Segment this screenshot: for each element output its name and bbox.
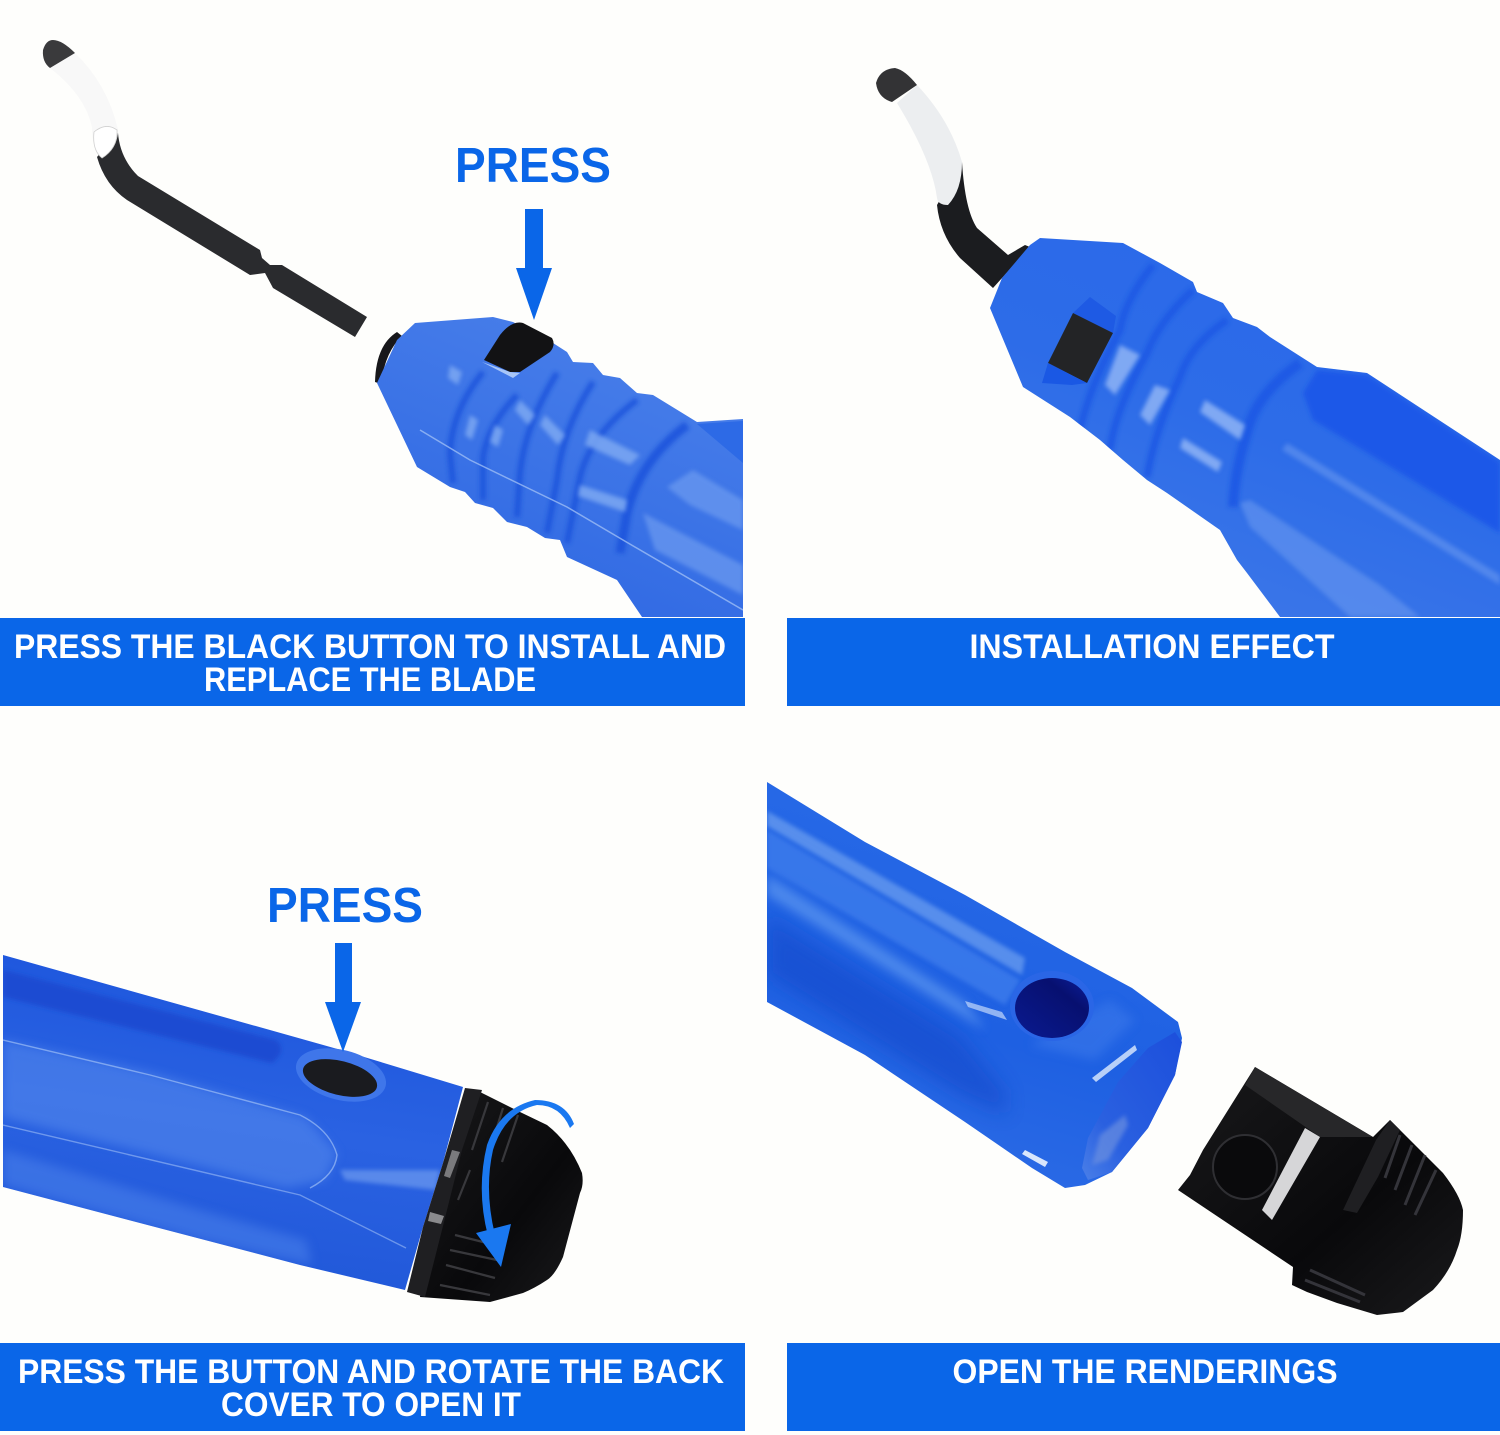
press label: PRESS <box>455 139 611 193</box>
down arrow <box>516 209 552 320</box>
black detached cap <box>1178 1067 1463 1315</box>
blue handle with black button <box>375 317 743 617</box>
blue handle <box>990 238 1500 617</box>
banner: press black button: REPLACE THE BLADE <box>204 661 536 699</box>
banner: installation effect <box>787 618 1500 706</box>
panel: installation effect <box>876 68 1500 617</box>
black rear cap <box>407 1088 583 1302</box>
banner: press black button <box>0 618 745 706</box>
banner: open renderings: OPEN THE RENDERINGS <box>952 1353 1338 1391</box>
banner: installation effect: INSTALLATION EFFECT <box>970 628 1335 666</box>
banner: rotate back cover <box>0 1343 745 1431</box>
rotate arrow <box>476 1100 574 1267</box>
blade removed from handle <box>43 40 367 337</box>
banner: press black button: PRESS THE BLACK BUTTON TO INSTALL AND <box>14 628 726 666</box>
banner: open renderings <box>787 1343 1500 1431</box>
down arrow <box>325 943 361 1052</box>
panel: open renderings <box>767 782 1463 1315</box>
panel: install blade <box>43 40 743 617</box>
press label: PRESS <box>267 879 423 933</box>
panel: rotate back cover <box>3 879 583 1302</box>
banner: rotate back cover: COVER TO OPEN IT <box>221 1386 521 1424</box>
installed blade <box>876 68 1030 288</box>
blue handle body <box>3 955 463 1290</box>
open blue tube <box>767 782 1182 1188</box>
banner: rotate back cover: PRESS THE BUTTON AND ROTATE THE BACK <box>18 1353 724 1391</box>
